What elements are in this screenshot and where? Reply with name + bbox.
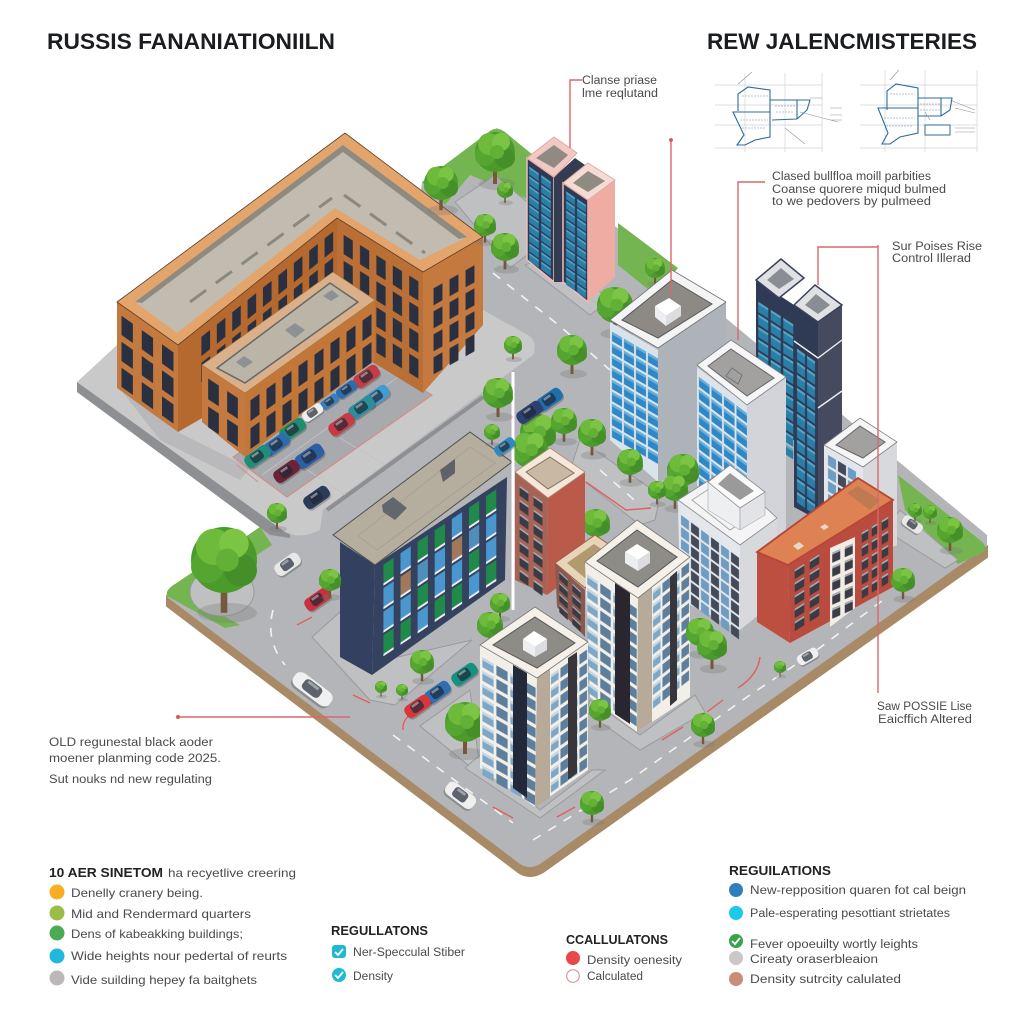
cars <box>242 363 925 813</box>
building: small white block <box>824 418 897 560</box>
legend: regulations centre: Ner-Specculal Stiber <box>353 947 465 959</box>
road markings <box>271 273 887 840</box>
blueprint diagram 2 <box>860 70 977 152</box>
building: red brick small tower <box>515 448 585 600</box>
callout: under blueprints: to we pedovers by pulmeed <box>772 196 931 208</box>
building: second blue-grey tower <box>697 340 786 555</box>
building: red long block <box>757 478 893 643</box>
callout: right lower <box>877 701 972 726</box>
trees behind red brick tower <box>512 414 610 550</box>
callout: right upper: Sur Poises Rise <box>892 241 982 253</box>
callout: left lower <box>49 737 221 786</box>
trees behind cream front tower <box>445 593 510 760</box>
callout: right upper: Control Illerad <box>892 253 971 265</box>
red route arrows <box>233 395 760 818</box>
legend: building types: 10 AER SINETOM <box>49 865 163 880</box>
green lawns <box>167 129 986 628</box>
plaza around brick building <box>77 250 535 538</box>
platform base <box>167 546 987 876</box>
legend: building types: Dens of kabeakking buildings; <box>71 927 243 941</box>
legend: regulations right: New-repposition quaren fot cal beign <box>750 885 966 897</box>
legend: regulations right: Cireaty oraserbleaion <box>750 954 878 966</box>
legend: regulations right: Pale-esperating pesottiant strietates <box>750 908 950 920</box>
callout: right lower: Saw POSSIE Lise <box>877 701 972 713</box>
leader lines <box>176 80 878 718</box>
legend: calculations: Density oenesity <box>587 955 682 967</box>
legend: building types <box>49 865 296 987</box>
building: navy low block <box>333 432 512 675</box>
callout: right lower: Eaicffich Altered <box>878 714 972 726</box>
legend: regulations right: Fever opoeuilty wortly leights <box>750 939 918 951</box>
callout: top centre <box>582 75 658 100</box>
legend: regulations centre: Density <box>353 971 393 983</box>
legend: building types: Wide heights nour pedertal of reurts <box>71 949 287 963</box>
callout: under blueprints: Coanse quorere miqud bulmed <box>772 184 946 196</box>
legend: calculations: Calculated <box>587 971 643 983</box>
building: cream tower front <box>480 607 588 808</box>
legend: regulations right <box>729 863 966 986</box>
white vertical line <box>512 372 514 610</box>
title: left heading: RUSSIS FANANIATIONIILN <box>47 29 335 54</box>
building: tall blue-grey tower <box>610 270 726 482</box>
title: right heading: REW JALENCMISTERIES <box>707 29 977 54</box>
building: cream tower back <box>585 520 690 732</box>
legend: building types: Denelly cranery being. <box>71 886 203 900</box>
callout: left lower: Sut nouks nd new regulating <box>49 774 212 786</box>
legend: building types: Vide suilding hepey fa baitghets <box>71 973 257 987</box>
legend: regulations centre: REGULLATONS <box>331 923 428 938</box>
callout: left lower: moener planming code 2025. <box>49 753 221 765</box>
building: small brown block <box>555 535 620 637</box>
trees <box>191 132 963 826</box>
parking lot <box>233 360 432 497</box>
trees behind blue tower <box>597 258 665 339</box>
callout: top centre: lme reqlutand <box>582 88 658 100</box>
legend: regulations centre <box>331 923 465 983</box>
callout: right upper <box>892 241 982 265</box>
road surface <box>167 128 987 867</box>
callout: under blueprints: Clased bullfloa moill parbities <box>772 171 931 183</box>
legend: building types: ha recyetlive creering <box>168 866 296 880</box>
building: navy twin tower <box>756 259 842 520</box>
legend: calculations <box>566 932 682 983</box>
callout: left lower: OLD regunestal black aoder <box>49 737 213 749</box>
legend: calculations: CCALLULATONS <box>566 932 668 947</box>
building: brick L-shaped block <box>117 133 483 457</box>
legend: regulations right: Density sutrcity calulated <box>750 974 901 986</box>
legend: regulations right: REGUILATIONS <box>729 863 831 878</box>
blueprint diagram 1 <box>715 72 842 152</box>
pavements and islands <box>190 175 958 818</box>
building: white mid block <box>678 465 777 641</box>
callout: under blueprints <box>772 171 946 208</box>
trees behind white mid block <box>648 454 699 513</box>
legend: building types: Mid and Rendermard quarters <box>71 907 251 921</box>
building: pink twin tower <box>527 137 615 302</box>
callout: top centre: Clanse priase <box>582 75 657 87</box>
